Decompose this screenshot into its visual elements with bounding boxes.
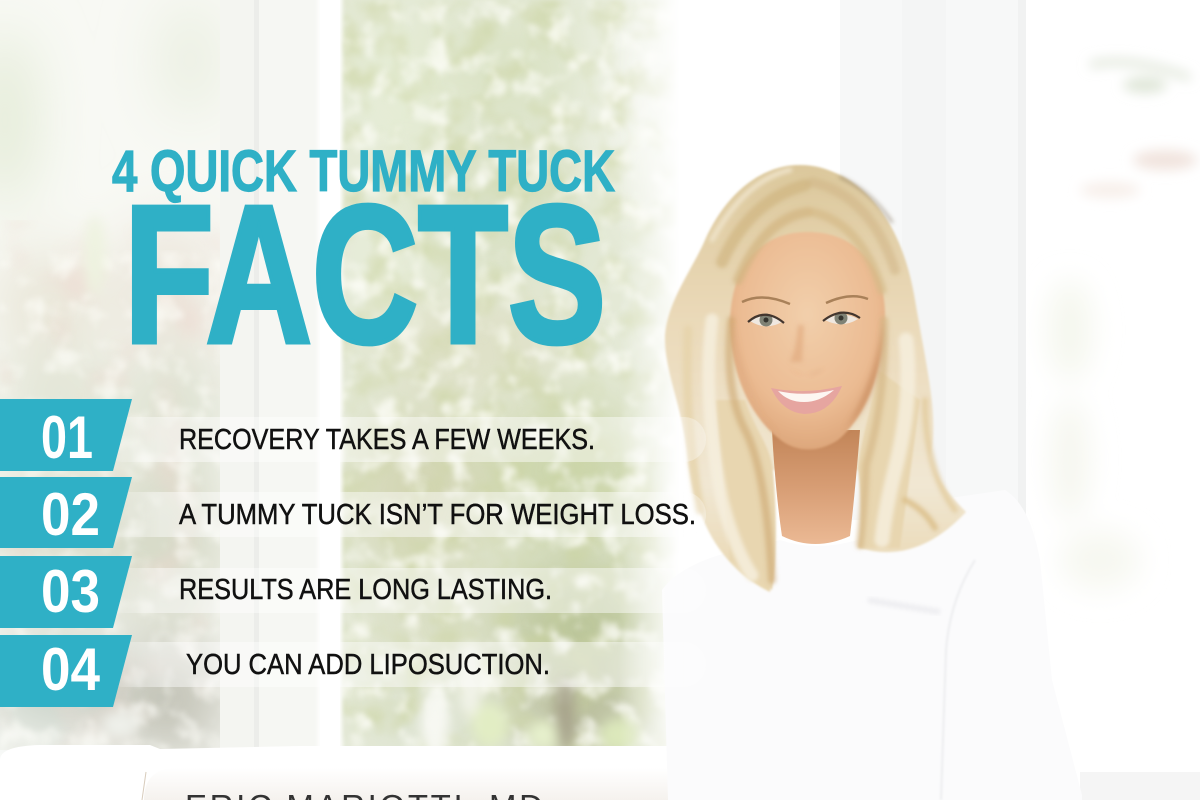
text band — [100, 417, 706, 462]
text band — [100, 492, 706, 537]
number: 04 — [41, 636, 101, 703]
sofa cushion — [144, 768, 680, 800]
fact row 4 — [0, 635, 706, 707]
hair strands — [687, 170, 955, 580]
shirt — [662, 490, 1082, 800]
fact row 1 — [0, 399, 706, 471]
fact text: RECOVERY TAKES A FEW WEEKS. — [179, 424, 595, 456]
fact text: YOU CAN ADD LIPOSUCTION. — [186, 649, 550, 681]
title line: 4 quick tummy tuck: 4 QUICK TUMMY TUCK — [112, 139, 615, 204]
number: 02 — [41, 481, 100, 548]
fact text: A TUMMY TUCK ISN’T FOR WEIGHT LOSS. — [179, 499, 696, 531]
title — [112, 139, 615, 384]
window frame column left — [220, 0, 342, 760]
fact row 2 — [0, 477, 706, 548]
foliage: right window pane — [1048, 62, 1200, 800]
text band — [100, 642, 706, 687]
fact text: RESULTS ARE LONG LASTING. — [179, 574, 552, 606]
face — [730, 232, 885, 449]
foliage: centre window pane — [340, 0, 680, 761]
hair back — [665, 165, 966, 592]
foliage: left window pane — [0, 0, 230, 760]
title line: facts: FACTS — [124, 165, 606, 384]
number ribbon — [0, 477, 132, 548]
eyes — [748, 312, 860, 326]
text band — [100, 568, 706, 613]
mouth — [771, 386, 842, 414]
number ribbon — [0, 635, 132, 707]
face shading — [733, 320, 884, 438]
number: 01 — [41, 404, 93, 471]
eyebrows — [742, 297, 790, 304]
nose — [790, 325, 824, 375]
number ribbon — [0, 556, 132, 628]
number: 03 — [41, 558, 100, 625]
window frame column right — [840, 0, 1026, 520]
sofa — [0, 745, 700, 800]
number ribbon — [0, 399, 132, 471]
fact row 3 — [0, 556, 706, 628]
neck — [772, 430, 860, 544]
fact list — [0, 399, 706, 707]
person: woman with blonde hair — [662, 165, 1082, 800]
front hair locks — [715, 370, 920, 590]
